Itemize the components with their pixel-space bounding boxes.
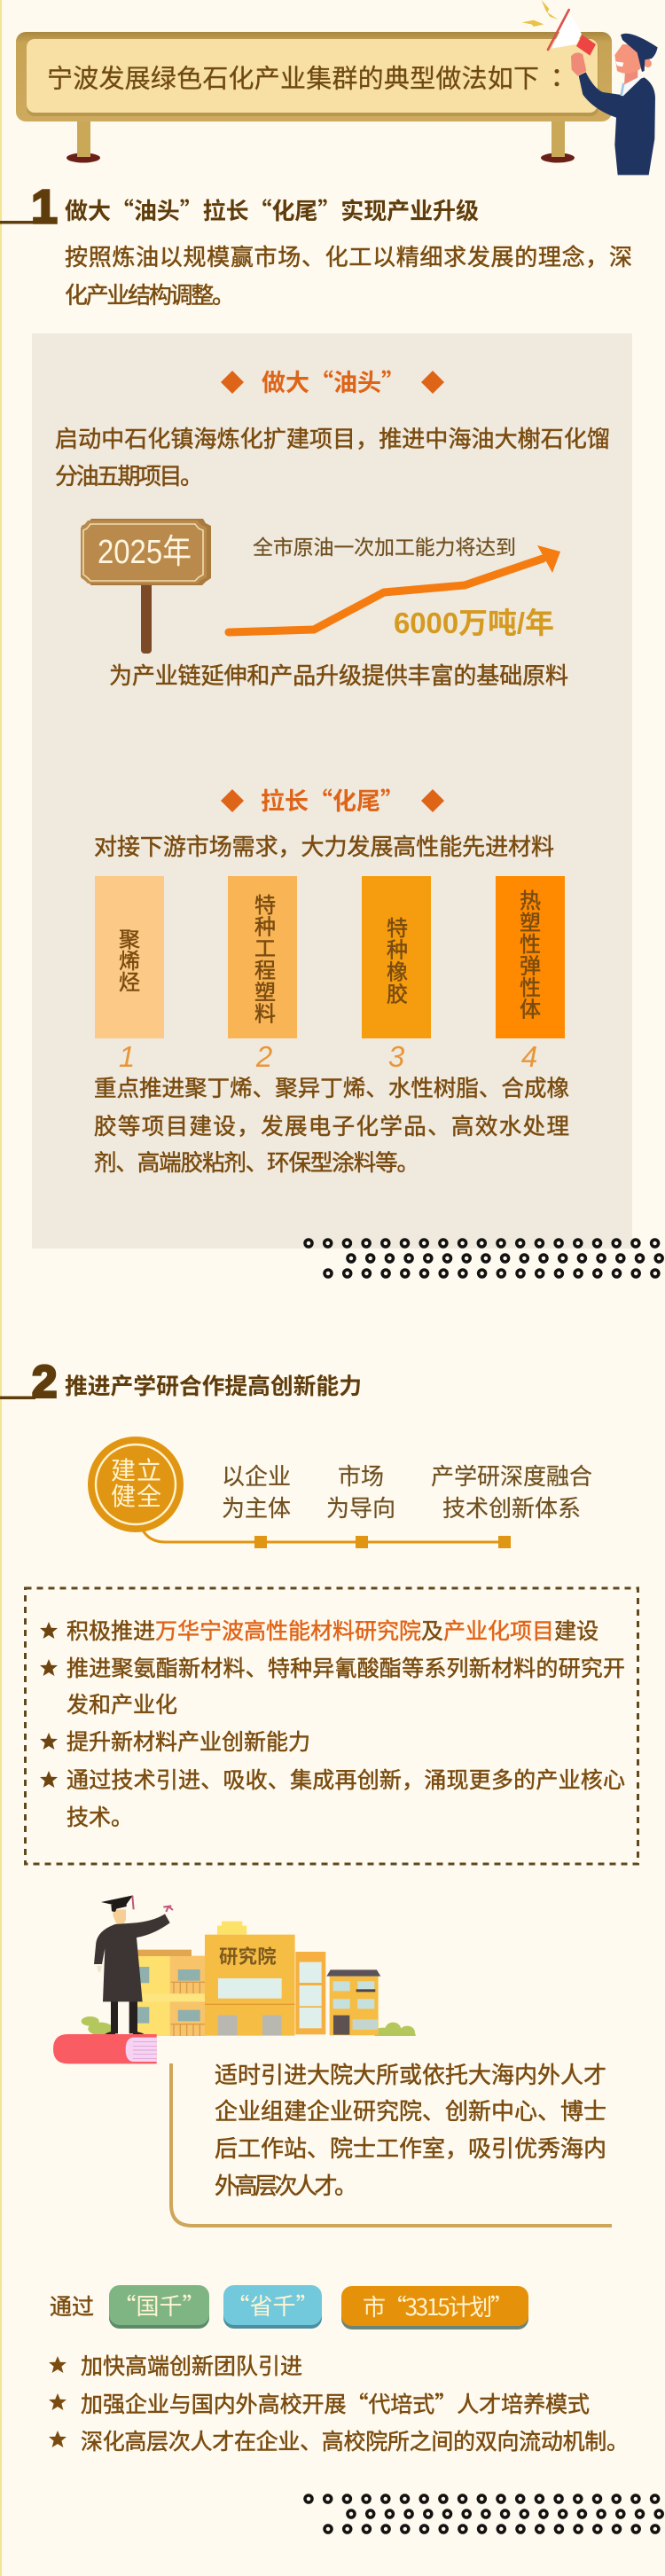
star bullets xyxy=(40,1622,58,1788)
section 1 intro text xyxy=(65,244,632,309)
number 2 xyxy=(0,1357,57,1406)
section 1 intro text: 化产业结构调整。 xyxy=(65,282,235,309)
text: talent description: 企业组建企业研究院、创新中心、博士 xyxy=(215,2098,606,2125)
bar 3: 胶 xyxy=(387,983,408,1007)
bar 4 xyxy=(496,876,565,1038)
bullet 4: 通过技术引进、吸收、集成再创新，涌现更多的产业核心 xyxy=(66,1768,625,1793)
heading: 拉长化尾 xyxy=(221,782,444,817)
icon: 建立健全 badge: 健全 xyxy=(111,1483,161,1510)
bar 3: 特 xyxy=(387,917,408,941)
bar 1: 烯 xyxy=(119,950,140,974)
text: 重点推进 xyxy=(94,1077,569,1176)
bar 3 xyxy=(362,876,431,1038)
institute building xyxy=(205,1922,295,2036)
bullet 4 xyxy=(66,1768,625,1830)
bar numbers: 1 xyxy=(119,1040,135,1073)
bullet 2 xyxy=(66,1656,625,1718)
bar 2: 塑 xyxy=(254,981,276,1005)
text: 对接下游: 对接下游市场需求，大力发展高性能先进材料 xyxy=(94,834,554,860)
bar 2 xyxy=(228,876,297,1038)
book xyxy=(53,2034,157,2063)
text: 启动项目: 分油五期项目。 xyxy=(55,463,203,489)
bar 2: 工 xyxy=(254,937,276,961)
dots: divider 2 xyxy=(309,2499,665,2529)
badge: 市3315计划 xyxy=(341,2286,528,2329)
bar 2: 料 xyxy=(254,1002,276,1027)
section 1 intro text: 按照炼油以规模赢市场、化工以精细求发展的理念，深 xyxy=(65,244,632,270)
bar 4: 性 xyxy=(520,933,541,957)
bar numbers xyxy=(119,1040,537,1073)
text: 产学研深度融合 xyxy=(431,1463,592,1522)
banner title: ： xyxy=(544,59,570,96)
number 1: 1 xyxy=(31,181,58,234)
text: 产学研深度融合: 产学研深度融合 xyxy=(431,1463,592,1490)
number 1 xyxy=(0,181,58,234)
bar numbers: 4 xyxy=(521,1040,537,1073)
icon: 2025 signpost: 2025年 xyxy=(98,534,192,571)
banner posts xyxy=(66,121,575,163)
section 1 title: 做大“油头”拉长“化尾”实现产业升级 xyxy=(65,193,479,226)
bar 1 xyxy=(95,876,164,1038)
bar 2: 程 xyxy=(254,959,276,983)
text: 以企业为主体 xyxy=(222,1463,291,1522)
banner sign xyxy=(16,32,612,163)
text: 市场为导向: 为导向 xyxy=(326,1495,395,1522)
heading: 拉长化尾: 拉长“化尾” xyxy=(261,782,404,817)
badge: 省千: “省千” xyxy=(226,2289,319,2322)
bar numbers: 2 xyxy=(255,1040,272,1073)
bar 4: 热 xyxy=(520,889,541,913)
panel: grey-beige content panel xyxy=(32,333,632,1249)
bar 4: 弹 xyxy=(520,954,541,979)
text: 启动项目: 启动中石化镇海炼化扩建项目，推进中海油大榭石化馏 xyxy=(55,426,610,452)
badge: 市3315计划: 市“3315计划” xyxy=(363,2290,513,2322)
text: talent description: 外高层次人才。 xyxy=(215,2173,357,2199)
section 2 heading xyxy=(0,1357,362,1406)
icon: 建立健全 badge xyxy=(88,1437,184,1532)
text: talent description: 适时引进大院大所或依托大海内外人才 xyxy=(215,2062,606,2088)
heading: 做大油头: 做大“油头” xyxy=(262,364,405,398)
bar 4: 性 xyxy=(520,976,541,1000)
bar 3: 种 xyxy=(387,938,408,963)
bar 3: 橡 xyxy=(387,961,408,984)
text: talent description: 后工作站、院士工作室，吸引优秀海内 xyxy=(215,2135,606,2162)
institute building: 研究院 xyxy=(219,1946,277,1968)
icon: man with megaphone xyxy=(522,0,658,175)
icon: 建立健全 badge: 建立 xyxy=(111,1457,161,1484)
list: talent measures: 加强企业与国内外高校开展“代培式”人才培养模式 xyxy=(81,2387,590,2419)
list: talent measures xyxy=(49,2354,629,2455)
connector line with nodes xyxy=(142,1529,511,1548)
panel: dashed box xyxy=(25,1588,638,1864)
list: talent measures: 加快高端创新团队引进 xyxy=(81,2354,302,2379)
bar 4: 体 xyxy=(520,998,541,1022)
text: 以企业为主体: 以企业 xyxy=(222,1463,291,1490)
bar 1: 聚 xyxy=(119,928,140,952)
text: capacity caption: 全市原油一次加工能力将达到 xyxy=(253,536,516,559)
callout: 6000万吨/年: 6000万吨/年 xyxy=(394,607,554,639)
bullet 1: 积极推进万华宁波高性能材料研究院及产业化项目建设 xyxy=(66,1619,598,1644)
left building xyxy=(129,1950,206,2036)
tower xyxy=(295,1952,325,2034)
text: 产学研深度融合: 技术创新体系 xyxy=(442,1495,581,1522)
text: 通过: 通过 xyxy=(50,2295,94,2320)
text: 重点推进: 胶等项目建设，发展电子化学品、高效水处理 xyxy=(94,1115,569,1139)
section 2 title: 推进产学研合作提高创新能力 xyxy=(65,1374,362,1399)
bar 2: 特 xyxy=(254,894,276,918)
text: 市场为导向 xyxy=(326,1463,395,1522)
bar numbers: 3 xyxy=(388,1040,405,1073)
chart: four material bars xyxy=(95,876,565,1073)
text: talent description xyxy=(215,2062,606,2199)
number 2: 2 xyxy=(32,1357,57,1406)
badge: 国千 xyxy=(109,2285,209,2329)
text: 重点推进: 剂、高端胶粘剂、环保型涂料等。 xyxy=(94,1151,419,1176)
graduate xyxy=(94,1895,173,2034)
bullet 2: 发和产业化 xyxy=(66,1693,177,1718)
bar 1: 烃 xyxy=(119,971,140,995)
illustration: graduate on book with research institute xyxy=(53,1895,416,2063)
panel: talent text frame xyxy=(171,2036,614,2226)
arrow: rising capacity xyxy=(229,545,560,632)
text: 启动项目 xyxy=(55,426,610,489)
bullet 3: 提升新材料产业创新能力 xyxy=(66,1730,310,1755)
text: 以企业为主体: 为主体 xyxy=(222,1495,291,1522)
badge: 国千: “国千” xyxy=(113,2289,206,2322)
bar 2: 种 xyxy=(254,915,276,940)
text: 基础原料: 为产业链延伸和产品升级提供丰富的基础原料 xyxy=(109,662,568,689)
dots: divider 1 xyxy=(309,1243,665,1273)
bullet 4: 技术。 xyxy=(66,1805,133,1830)
bushes xyxy=(82,2016,416,2039)
list: talent measures: 深化高层次人才在企业、高校院所之间的双向流动机制。 xyxy=(81,2430,629,2455)
section 1 heading xyxy=(0,181,479,234)
bar 4: 塑 xyxy=(520,912,541,935)
banner title: 宁波发展绿色石化产业集群的典型做法如下 xyxy=(47,64,539,94)
list: dashed box bullets xyxy=(40,1619,625,1830)
icon: 2025 signpost xyxy=(81,519,211,654)
text: 重点推进: 重点推进聚丁烯、聚异丁烯、水性树脂、合成橡 xyxy=(94,1077,569,1101)
star bullets xyxy=(49,2356,66,2447)
text: 市场为导向: 市场 xyxy=(338,1463,384,1490)
banner board xyxy=(16,32,612,121)
bullet 2: 推进聚氨酯新材料、特种异氰酸酯等系列新材料的研究开 xyxy=(66,1656,625,1681)
heading: 做大油头 xyxy=(221,364,444,398)
small building xyxy=(326,1969,380,2035)
